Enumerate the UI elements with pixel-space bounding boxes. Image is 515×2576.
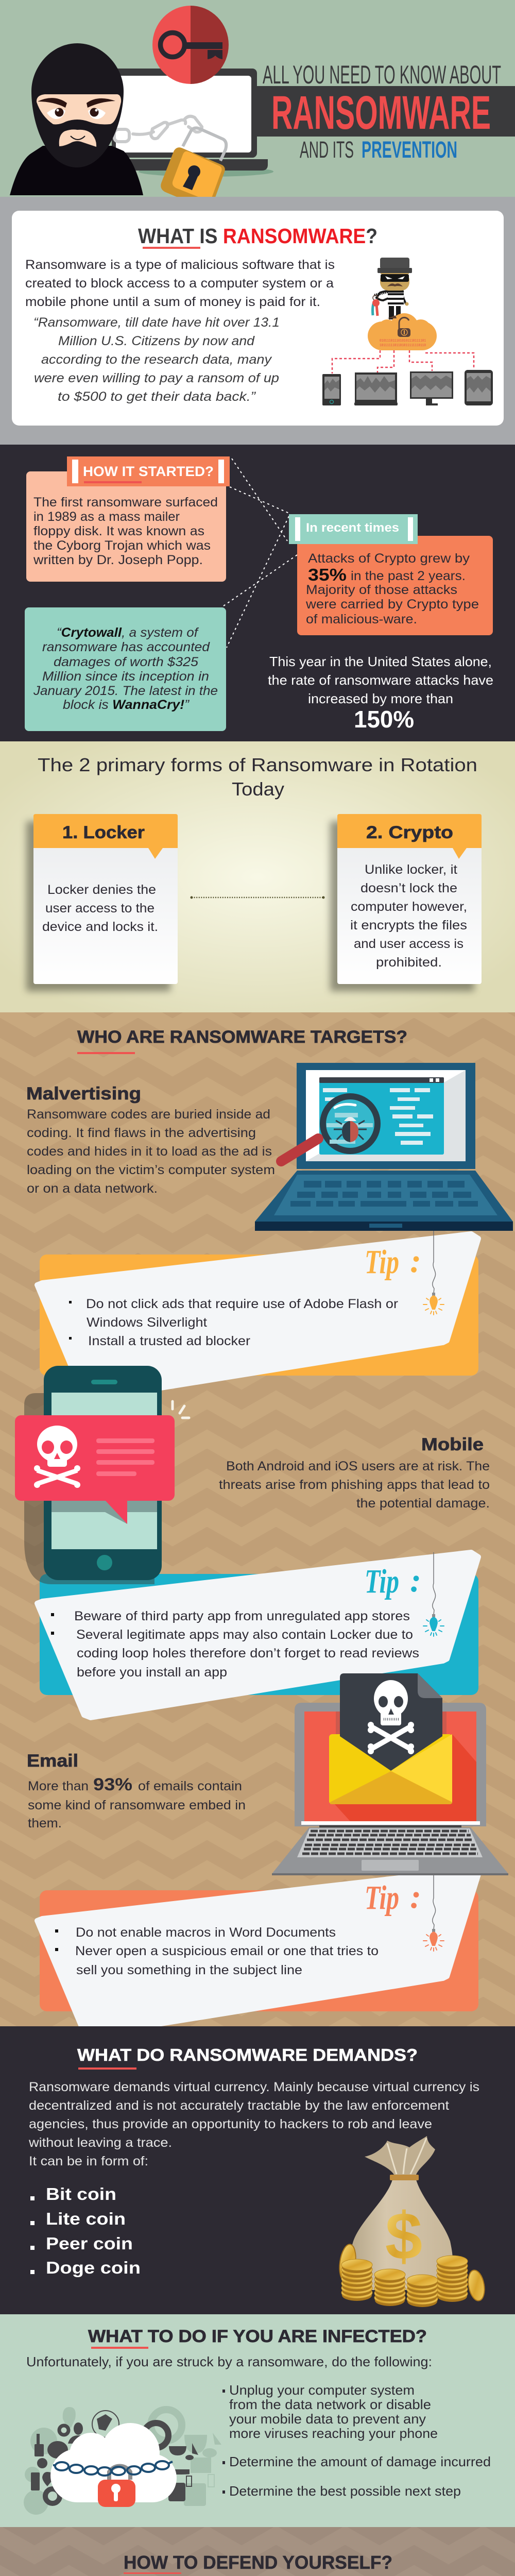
stat: 150 percent: the rate of ransomware attacks have: [268, 672, 493, 688]
panel: primary forms: [0, 741, 515, 1012]
card: locker: user access to the: [45, 901, 154, 916]
text: email: them.: [28, 1816, 62, 1831]
heading: WHO ARE RANSOMWARE TARGETS?: [77, 1027, 407, 1047]
stat: 150 percent: 150%: [354, 706, 414, 733]
text: quote: according to the research data, many: [41, 352, 272, 367]
tip card: mobile: before you install an app: [77, 1665, 227, 1680]
illustration: thief on cloud with devices: 0101110111010101110111101: [380, 339, 426, 343]
text: definition: Ransomware is a type of malicious software that is: [25, 258, 335, 272]
card: in recent times: in the past 2 years.: [351, 569, 466, 583]
text: definition: mobile phone until a sum of money is paid for it.: [25, 295, 320, 309]
list: steps: your mobile data to prevent any: [229, 2411, 426, 2427]
title band: [257, 86, 515, 137]
panel: header: [0, 0, 515, 207]
card: locker: device and locks it.: [42, 920, 158, 934]
title text: AND ITS: [300, 137, 354, 163]
stat: 150 percent: This year in the United States alone,: [269, 654, 492, 669]
card: cryptowall quote: block is WannaCry! ”: [63, 698, 190, 712]
card: in recent times: were carried by Crypto type: [305, 597, 479, 612]
list: steps: Determine the best possible next step: [229, 2483, 461, 2499]
card: crypto: doesn’t lock the: [360, 881, 457, 895]
tip card: mobile: Beware of third party app from unregulated app stores: [74, 1609, 410, 1623]
text: mobile: the potential damage.: [356, 1496, 490, 1511]
text: demands description: Ransomware demands virtual currency. Mainly because virtual currency is: [29, 2080, 479, 2094]
card: cryptowall quote: “Crytowall, a system of: [57, 625, 199, 640]
card: crypto: 2. Crypto: [366, 823, 453, 842]
text: quote: were even willing to pay a ransom of up: [34, 371, 279, 385]
card: crypto: and user access is: [354, 937, 464, 951]
card: cryptowall quote: ransomware has accounted: [42, 640, 210, 654]
illustration: thief on cloud with devices: 1011111101101011111110110: [380, 344, 426, 348]
panel: ransomware demands: [0, 2026, 515, 2314]
illustration: locked cloud with icons: [24, 2407, 221, 2515]
illustration: phone with alert: [15, 1366, 189, 1584]
card: crypto: Unlike locker, it: [365, 862, 457, 877]
card: in recent times: 35%: [308, 565, 347, 584]
heading: Today: [232, 778, 284, 800]
text: malvertising: Ransomware codes are buried inside ad: [27, 1107, 270, 1122]
text: email: More than: [28, 1779, 89, 1793]
laptop behind hacker: [112, 69, 273, 177]
card: locker: [26, 814, 178, 991]
heading: WHAT DO RANSOMWARE DEMANDS?: [77, 2045, 418, 2064]
tag: how it started: HOW IT STARTED?: [83, 464, 214, 479]
list: steps: Unplug your computer system: [229, 2382, 415, 2398]
card: cryptowall quote: [25, 607, 226, 731]
card: crypto: it encrypts the files: [350, 918, 467, 933]
card: in recent times: Attacks of Crypto grew by: [308, 551, 470, 566]
heading: [38, 754, 477, 800]
card: crypto: prohibited.: [376, 955, 442, 970]
stat: 150 percent: [268, 654, 493, 733]
card: in recent times: Majority of those attacks: [306, 583, 457, 597]
list: coin types: Peer coin: [46, 2234, 133, 2253]
tip card: mobile: :: [410, 1562, 421, 1599]
tip card: malvertising: Install a trusted ad blocker: [88, 1334, 250, 1348]
panel: how it started: [0, 445, 515, 741]
list: coin types: Lite coin: [46, 2209, 126, 2228]
card: in recent times: [289, 514, 493, 635]
panel: ransomware targets: [0, 1012, 515, 2035]
list: steps: more viruses reaching your phone: [229, 2426, 438, 2441]
list: steps: [222, 2382, 491, 2499]
heading: WHAT TO DO IF YOU ARE INFECTED?: [88, 2327, 427, 2346]
list: coin types: Doge coin: [46, 2258, 141, 2277]
tip card: mobile: coding loop holes therefore don’t forget to read reviews: [77, 1646, 419, 1660]
tip card: mobile: Several legitimate apps may also contain Locker due to: [76, 1628, 413, 1642]
text: demands description: decentralized and is not accurately tractable by the law enforcement: [29, 2098, 449, 2113]
text: quote: “Ransomware, till date have hit over 13.1: [33, 315, 280, 330]
text: quote: Million U.S. Citizens by now and: [58, 334, 255, 348]
icon: chain: [114, 116, 202, 142]
text: demands description: [28, 2080, 479, 2168]
text: malvertising: or on a data network.: [27, 1181, 158, 1196]
list: coin types: [30, 2184, 141, 2277]
stat: 150 percent: increased by more than: [308, 691, 453, 706]
heading: HOW TO DEFEND YOURSELF?: [124, 2552, 392, 2573]
card: crypto: computer however,: [351, 900, 467, 914]
tip card: email: sell you something in the subject line: [76, 1963, 302, 1977]
illustration: money bag and coins: $: [385, 2198, 422, 2274]
tip card: email: Do not enable macros in Word Documents: [76, 1925, 336, 1940]
card: cryptowall quote: Million since its inception in: [42, 669, 209, 684]
text: demands description: It can be in form of:: [29, 2154, 148, 2168]
heading: The 2 primary forms of Ransomware in Rotation: [38, 754, 477, 775]
illustration: email laptop with skull: [272, 1673, 508, 1875]
text: quote: [33, 315, 280, 404]
text: intro: Unfortunately, if you are struck by a ransomware, do the following:: [26, 2354, 432, 2369]
text: definition: [25, 258, 335, 309]
icon: padlock: [162, 128, 226, 207]
panel: what to do if infected: [0, 2314, 515, 2527]
card: first ransomware: written by Dr. Joseph Popp.: [33, 553, 203, 567]
card: locker: 1. Locker: [62, 823, 145, 842]
text: definition: created to block access to a computer system or a: [25, 276, 334, 291]
list: steps: from the data network or disable: [229, 2397, 431, 2412]
text: malvertising: coding. It find flaws in the advertising: [27, 1126, 256, 1140]
text: demands description: without leaving a trace.: [28, 2136, 172, 2150]
text: email: 93%: [93, 1775, 132, 1794]
icon: key balloon: [152, 6, 229, 84]
text: mobile: Mobile: [421, 1435, 484, 1454]
list: steps: Determine the amount of damage incurred: [229, 2454, 491, 2469]
tip card: malvertising: Windows Silverlight: [87, 1315, 207, 1330]
card: locker: Locker denies the: [47, 883, 156, 897]
tip card: email: [37, 1867, 478, 2035]
text: malvertising: loading on the victim’s computer system: [27, 1163, 275, 1177]
tip card: email: :: [410, 1878, 421, 1916]
panel: what is ransomware: [0, 197, 515, 445]
panel: how to defend yourself: [0, 2527, 515, 2576]
text: mobile: Both Android and iOS users are at risk. The: [226, 1459, 490, 1473]
text: email: some kind of ransomware embed in: [28, 1798, 246, 1812]
text: quote: to $500 to get their data back.”: [58, 389, 256, 404]
card: cryptowall quote: January 2015. The latest in the: [33, 684, 218, 698]
tip card: mobile: Tip: [365, 1563, 399, 1600]
tip card: mobile: [37, 1552, 478, 1718]
text: mobile: threats arise from phishing apps that lead to: [219, 1478, 490, 1492]
text: email: [27, 1751, 246, 1831]
card: cryptowall quote: damages of worth $325: [54, 655, 198, 669]
card: in recent times: of malicious-ware.: [306, 612, 417, 626]
text: email: of emails contain: [138, 1779, 242, 1793]
tip card: malvertising: Tip: [365, 1243, 399, 1281]
illustration: laptop with bug: [255, 1063, 513, 1231]
text: malvertising: [26, 1084, 275, 1196]
text: demands description: agencies, thus provide an opportunity to hackers to rob and leave: [29, 2117, 432, 2131]
title text: [263, 60, 501, 163]
tip card: email: Tip: [365, 1879, 399, 1917]
tip card: malvertising: :: [410, 1242, 421, 1280]
dashed connectors: [224, 459, 297, 648]
list: coin types: Bit coin: [46, 2184, 116, 2204]
text: email: Email: [27, 1751, 78, 1771]
card: first ransomware: in 1989 as a mass mailer: [33, 510, 180, 524]
illustration: money bag and coins: [337, 2136, 487, 2307]
text: malvertising: Malvertising: [26, 1084, 141, 1104]
tip card: email: Never open a suspicious email or one that tries to: [75, 1944, 379, 1958]
dotted connector: [191, 896, 324, 899]
tip card: malvertising: [37, 1231, 478, 1399]
hacker figure: [10, 43, 143, 195]
card: first ransomware: the Cyborg Trojan which was: [33, 538, 211, 553]
card: in recent times: In recent times: [306, 521, 399, 535]
tag: how it started: [67, 456, 230, 486]
card: first ransomware: The first ransomware surfaced: [33, 495, 218, 510]
tip card: malvertising: Do not click ads that require use of Adobe Flash or: [86, 1297, 398, 1311]
text: mobile: [219, 1435, 490, 1511]
text: malvertising: codes and hides in it to load as the ad is: [27, 1144, 272, 1159]
heading: WHAT IS RANSOMWARE?: [138, 224, 377, 248]
illustration: thief on cloud with devices: [322, 258, 493, 405]
title text: PREVENTION: [362, 137, 457, 163]
card: first ransomware: floppy disk. It was known as: [33, 524, 204, 538]
card: first ransomware: [26, 471, 226, 582]
card: crypto: [330, 814, 482, 991]
